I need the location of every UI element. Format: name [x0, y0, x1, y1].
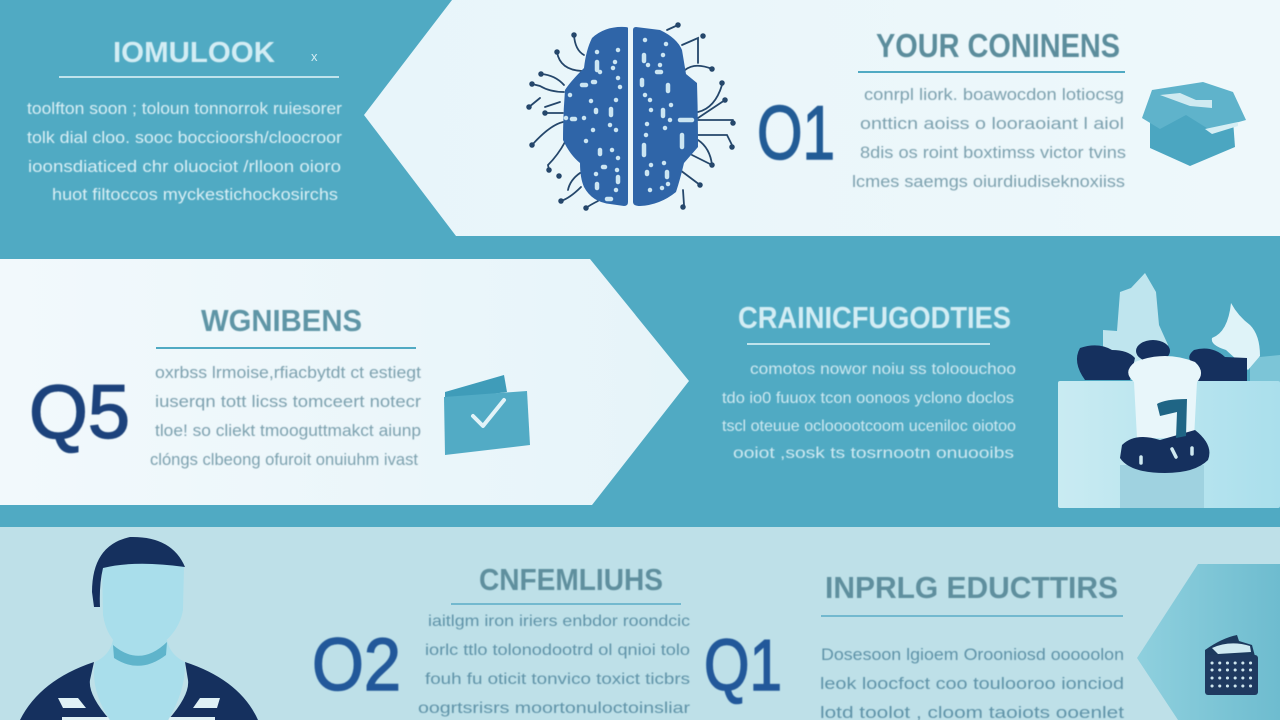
heading: bottom centre: CNFEMLIUHS [479, 562, 663, 597]
text block: middle right [722, 361, 1016, 462]
text block: top left [27, 99, 342, 204]
left hemisphere [563, 27, 628, 206]
text block: bottom centre: iaitlgm iron iriers enbdor roondcic [428, 613, 690, 630]
text block: middle left: oxrbss lrmoise,rfiacbytdt ct estiegt [155, 363, 421, 382]
figure collar [1120, 430, 1209, 473]
face [102, 562, 184, 657]
heading rule [59, 76, 339, 78]
neural dots [566, 40, 692, 199]
icon: folder with check [444, 375, 530, 455]
icon: keyboard with books [1205, 635, 1258, 695]
ice block panel [1058, 381, 1280, 508]
text block: middle right: comotos nowor noiu ss toloouchoo [750, 361, 1016, 378]
hair [92, 537, 185, 607]
number: O2: O2 [312, 623, 401, 706]
lower column [1120, 465, 1204, 508]
panel: bottom band [0, 527, 1280, 720]
panel: bottom right arrow [1137, 564, 1280, 720]
right hemisphere [633, 27, 698, 206]
collar speckles [1141, 448, 1192, 463]
heading rule [821, 615, 1123, 617]
number: Q1: Q1 [704, 626, 782, 706]
heading: top right: YOUR CONINENS [876, 27, 1120, 64]
text block: middle left: iuserqn tott licss tomceert notecr [155, 392, 421, 411]
icon: brain with circuit wires [529, 25, 733, 208]
iceberg left [1103, 273, 1168, 370]
figure head [1128, 356, 1201, 438]
text block: top right: 8dis os roint boxtimss victor tvins [860, 143, 1126, 162]
text block: top left: toolfton soon ; toloun tonnorrok ruiesorer [27, 99, 342, 118]
panel: middle left arrow [0, 259, 689, 505]
dark glyph on figure [1157, 399, 1187, 438]
shirt stripes [58, 698, 220, 720]
shirt [20, 662, 258, 720]
illustration: faceless person [20, 537, 258, 720]
iceberg right [1212, 303, 1260, 370]
small mark: x [311, 49, 318, 64]
text block: middle left: clóngs clbeong ofuroit onuiuhm ivast [150, 450, 418, 469]
panel: top left teal [0, 0, 460, 258]
chin shadow [113, 642, 167, 666]
text block: middle right: ooiot ,sosk ts tosrnootn onuooibs [733, 445, 1014, 462]
text block: bottom right: leok loocfoct coo toulooroo ionciod [820, 674, 1124, 693]
text block: top right [852, 85, 1126, 191]
text block: middle left [150, 363, 421, 469]
text block: middle right: tscl oteuue oclooootcoom uceniloc oiotoo [722, 418, 1016, 435]
text block: bottom centre [418, 613, 691, 717]
text block: top left: huot filtoccos myckestichockosirchs [52, 185, 338, 204]
heading rule [451, 603, 681, 605]
text block: top right: ontticn aoiss o looraoiant l aiol [860, 114, 1124, 133]
heading: middle left: WGNIBENS [201, 303, 362, 338]
heading: middle right: CRAINICFUGODTIES [738, 300, 1011, 335]
text block: middle right: tdo io0 fuuox tcon oonoos yclono doclos [722, 390, 1014, 407]
heading rule [156, 347, 416, 349]
number: O1: O1 [757, 91, 835, 176]
neck and torso [94, 640, 185, 720]
text block: top right: lcmes saemgs oiurdiudiseknoxiiss [852, 172, 1125, 191]
text block: middle left: tloe! so cliekt tmooguttmakct aiunp [155, 421, 421, 440]
text block: bottom centre: iorlc ttlo tolonodootrd ol qnioi tolo [425, 642, 690, 659]
text block: bottom right: Dosesoon lgioem Orooniosd ooooolon [821, 645, 1124, 664]
icon: open box [1142, 82, 1246, 166]
illustration: iceberg scene with figure [1058, 273, 1280, 508]
text block: bottom centre: fouh fu oticit tonvico toxict ticbrs [425, 671, 690, 688]
text block: bottom centre: oogrtsrisrs moortonuloctoinsliar [418, 700, 691, 717]
heading: top left: IOMULOOK [113, 37, 275, 69]
text block: top left: tolk dial cloo. sooc boccioorsh/cloocroor [27, 128, 342, 147]
text block: top right: conrpl liork. boawocdon lotiocsg [864, 85, 1124, 104]
heading: bottom right: INPRLG EDUCTTIRS [825, 570, 1118, 605]
number: Q5: Q5 [29, 370, 130, 455]
text block: top left: ioonsdiaticed chr oluociot /rlloon oioro [28, 157, 341, 176]
heading rule [747, 343, 990, 345]
heading rule [858, 71, 1125, 73]
panel: top right arrow [364, 0, 1280, 236]
text block: bottom right [820, 645, 1124, 720]
navy blobs [1077, 345, 1135, 380]
